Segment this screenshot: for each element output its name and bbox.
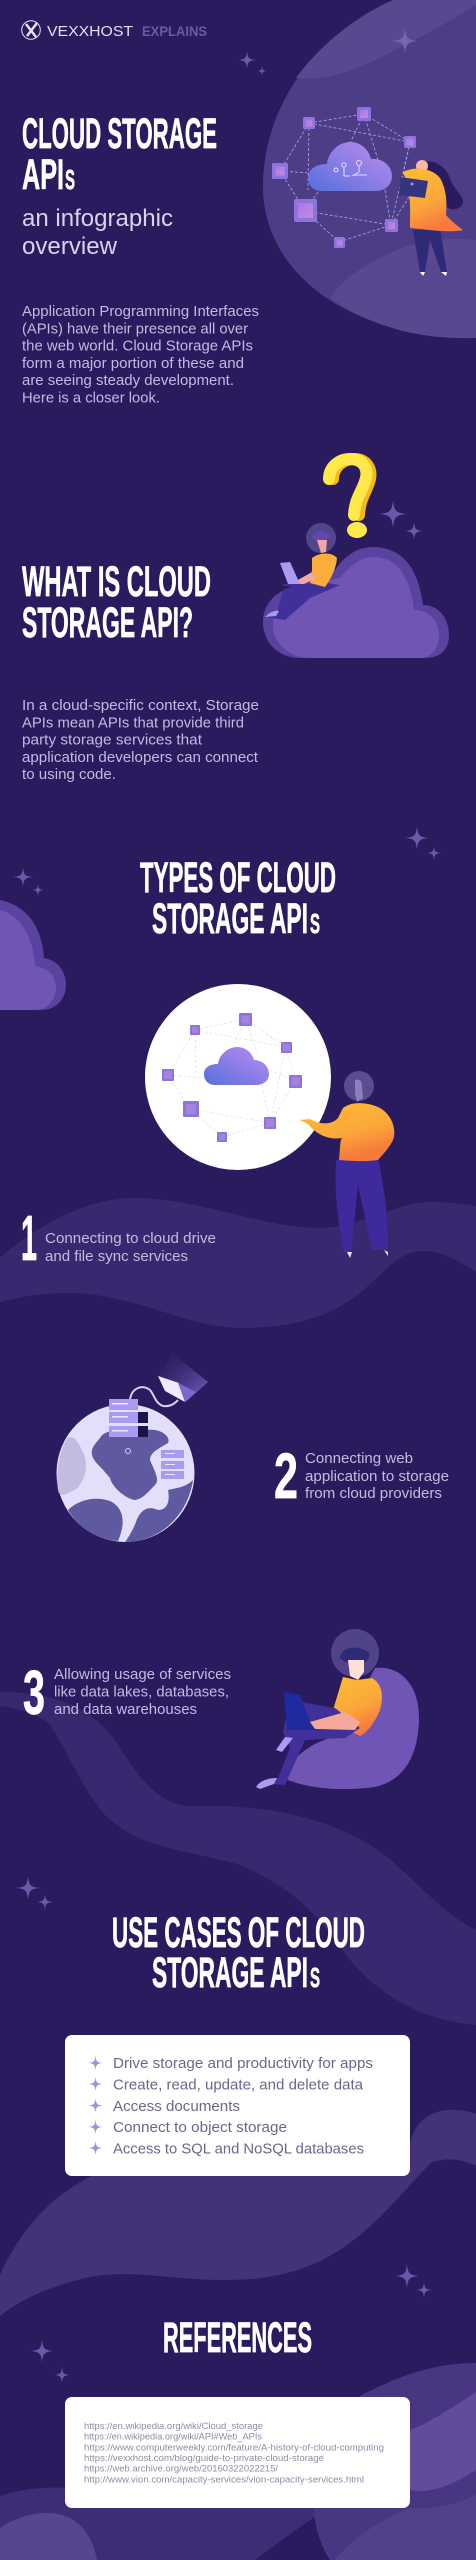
panel: use cases list: Access documents	[113, 2099, 240, 2115]
definition paragraph: party storage services that	[22, 733, 202, 749]
title: CLOUD STORAGE	[22, 110, 217, 158]
panel: use cases list	[65, 2035, 410, 2176]
heading: what is cloud storage api: WHAT IS CLOUD	[22, 558, 211, 606]
stars: references	[30, 2264, 432, 2383]
heading: use cases	[112, 1909, 365, 1997]
panel: references list: https://en.wikipedia.org/wiki/API#Web_APIs	[84, 2432, 262, 2443]
heading: what is cloud storage api: STORAGE API?	[22, 599, 193, 647]
circle: bottom left planet	[0, 2513, 97, 2560]
heading: what is cloud storage api	[22, 558, 211, 647]
network nodes	[272, 107, 416, 248]
type 3: 3	[23, 1659, 45, 1728]
hero planet with network illustration	[263, 0, 476, 338]
panel: use cases list: Access to SQL and NoSQL databases	[113, 2142, 364, 2158]
panel: references list: https://vexxhost.com/blog/guide-to-private-cloud-storage	[84, 2453, 324, 2464]
panel: references list	[65, 2397, 410, 2508]
type 1	[21, 1202, 216, 1274]
heading: use cases: STORAGE API	[152, 1949, 308, 1997]
intro paragraph	[22, 304, 259, 406]
background blob: bottom upper	[0, 2110, 476, 2316]
person pointing at circle	[300, 1071, 394, 1258]
type 1: Connecting to cloud drive	[45, 1231, 216, 1247]
illustration: person on beanbag	[256, 1629, 419, 1789]
background wave: use cases section	[0, 1692, 476, 2025]
cloud at left edge	[0, 900, 66, 1010]
panel: references list: https://www.computerweekly.com/feature/A-history-of-cloud-computing	[84, 2442, 384, 2453]
intro paragraph: are seeing steady development.	[22, 373, 234, 389]
star on planet	[392, 28, 418, 54]
stars: hero	[238, 51, 267, 76]
woman with laptop	[399, 160, 463, 276]
intro paragraph: Application Programming Interfaces	[22, 304, 259, 320]
intro paragraph: Here is a closer look.	[22, 390, 160, 406]
background blob: bottom right	[313, 2363, 476, 2560]
cloud	[308, 142, 392, 191]
decorative lighter bands: bottom right	[410, 2392, 476, 2491]
header logo: VEXXHOST	[47, 23, 133, 40]
network lines	[280, 114, 420, 242]
icon: question mark	[329, 459, 370, 538]
illustration: person on cloud	[263, 523, 449, 658]
type 3: and data warehouses	[54, 1702, 197, 1718]
intro paragraph: form a major portion of these and	[22, 356, 244, 372]
heading: types of cloud storage apis: S	[310, 908, 320, 939]
panel: use cases list: Connect to object storage	[113, 2120, 287, 2136]
heading: references: REFERENCES	[163, 2314, 312, 2362]
globe with servers and laptop	[56, 1353, 208, 1542]
definition paragraph	[22, 698, 259, 783]
definition paragraph: application developers can connect	[22, 750, 258, 766]
heading: types of cloud storage apis: STORAGE API	[152, 895, 308, 943]
panel: references list: http://www.vion.com/capacity-services/vion-capacity-services.html	[84, 2474, 364, 2485]
intro paragraph: (APIs) have their presence all over	[22, 321, 248, 337]
type 1: 1	[21, 1202, 37, 1274]
panel: references list: https://en.wikipedia.org/wiki/Cloud_storage	[84, 2421, 263, 2432]
definition paragraph: to using code.	[22, 767, 116, 783]
stars: types section	[13, 826, 441, 896]
header logo: EXPLAINS	[142, 23, 207, 39]
background blob: bottom left	[0, 2488, 316, 2560]
title: S	[65, 164, 75, 195]
type 3: like data lakes, databases,	[54, 1684, 229, 1700]
type 3	[23, 1659, 231, 1728]
subtitle: an infographic	[22, 205, 173, 232]
subtitle	[22, 205, 173, 260]
type 3: Allowing usage of services	[54, 1667, 231, 1683]
type 2: 2	[274, 1440, 298, 1512]
header logo	[22, 21, 207, 40]
panel: use cases list: Create, read, update, and delete data	[113, 2077, 364, 2093]
subtitle: overview	[22, 233, 118, 260]
background wave: types section	[0, 1198, 476, 1328]
panel: references list: https://web.archive.org/web/20160322022215/	[84, 2464, 278, 2475]
definition paragraph: In a cloud-specific context, Storage	[22, 698, 259, 714]
white circle with cloud network	[145, 984, 331, 1170]
intro paragraph: the web world. Cloud Storage APIs	[22, 339, 253, 355]
stars: use cases	[16, 1876, 53, 1910]
heading: use cases: S	[310, 1962, 320, 1993]
stars: question mark	[379, 500, 423, 540]
type 2	[274, 1440, 449, 1512]
type 2: Connecting web	[305, 1451, 413, 1467]
title	[22, 110, 217, 199]
definition paragraph: APIs mean APIs that provide third	[22, 715, 244, 731]
type 2: from cloud providers	[305, 1486, 442, 1502]
title: API	[22, 151, 64, 199]
heading: types of cloud storage apis	[140, 854, 336, 943]
type 2: application to storage	[305, 1469, 449, 1485]
panel: use cases list: Drive storage and productivity for apps	[113, 2056, 373, 2072]
type 1: and file sync services	[45, 1249, 188, 1265]
